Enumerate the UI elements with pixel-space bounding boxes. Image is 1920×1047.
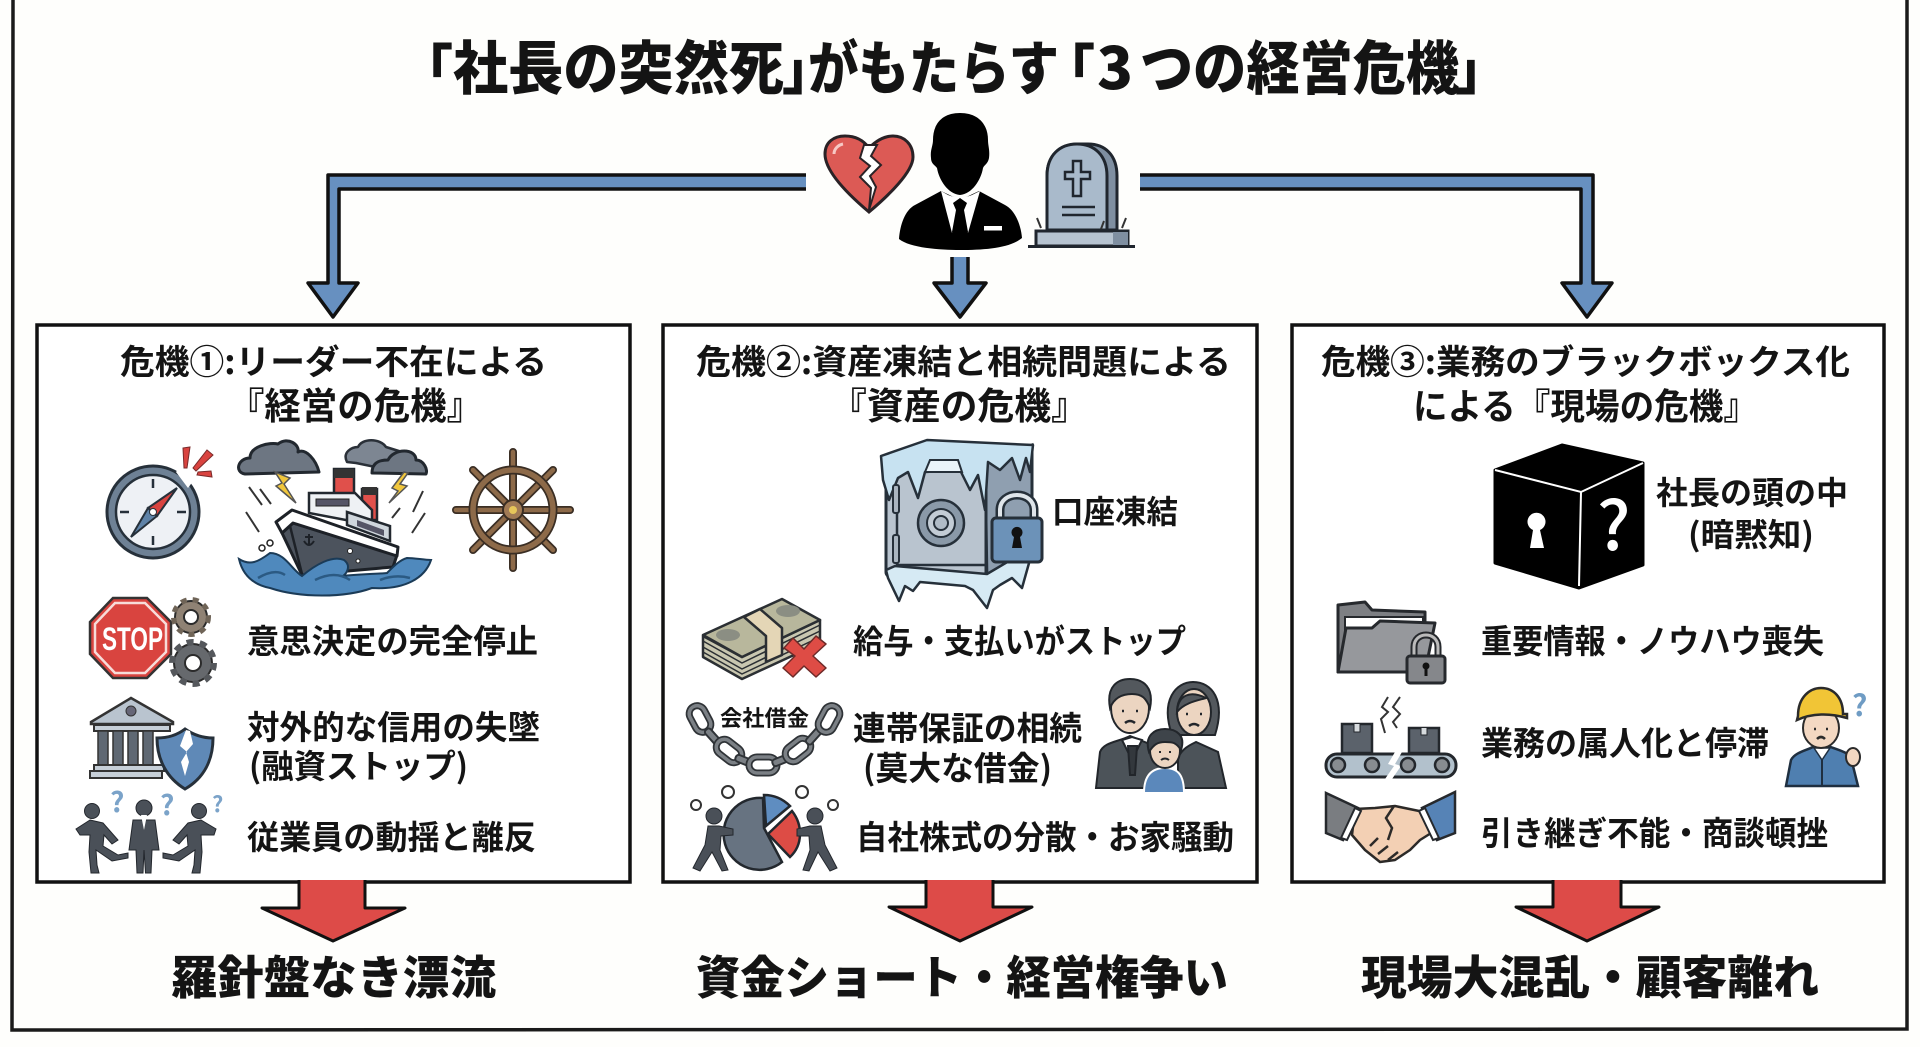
icon: chain with company debt: 会社借金 (720, 701, 809, 733)
arrow: red result 2 (889, 880, 1032, 941)
text: decision stop: 意思決定の完全停止 (247, 615, 538, 663)
icon: broken conveyor (1326, 697, 1456, 779)
title: 社長の突然死 (453, 22, 784, 106)
icon: broken compass (107, 447, 213, 558)
text: joint guarantee (853, 702, 1082, 790)
text: joint guarantee: 連帯保証の相続 (853, 702, 1082, 750)
icon: employees leaving (76, 781, 223, 873)
text: credit loss: 対外的な信用の失墜 (247, 701, 540, 749)
panel 1 heading: 危機①:リーダー不在による (120, 335, 547, 384)
icon: broken heart (825, 136, 913, 212)
text: siloed work: 業務の属人化と停滞 (1481, 717, 1769, 765)
icon: cash stack with cross (703, 599, 826, 679)
icon: frozen safe (881, 440, 1042, 608)
text: joint guarantee: (莫大な借金) (863, 742, 1052, 790)
text: stock dispute: 自社株式の分散・お家騒動 (856, 811, 1234, 859)
icon: grieving family (1096, 679, 1226, 793)
text: account freeze: 口座凍結 (1052, 487, 1178, 533)
arrow: centre connector (934, 257, 986, 317)
panel 2 heading (696, 335, 1231, 430)
icon: chain with company debt (686, 701, 843, 773)
panel 3 heading: による『現場の危機』 (1413, 378, 1758, 430)
text: credit loss: (融資ストップ) (249, 740, 468, 788)
text: know-how loss: 重要情報・ノウハウ喪失 (1481, 615, 1824, 663)
text: credit loss (247, 701, 540, 788)
icon: bank and cracked shield (90, 698, 213, 789)
icon: employees leaving: ? (212, 787, 223, 819)
arrow: red result 1 (262, 880, 405, 941)
title: 」 (782, 26, 836, 105)
title: 3 (1097, 22, 1133, 106)
text: tacit knowledge: 社長の頭の中 (1656, 468, 1848, 514)
text: handover failure: 引き継ぎ不能・商談頓挫 (1481, 807, 1828, 855)
title (399, 22, 1509, 106)
icon: locked folder (1338, 602, 1445, 683)
panel: crisis 1 management (37, 325, 630, 882)
icon: president silhouette (899, 113, 1022, 250)
result text 3: 現場大混乱・顧客離れ (1361, 942, 1819, 1008)
central icons: president death (825, 113, 1135, 250)
result text 2: 資金ショート・経営権争い (696, 942, 1228, 1008)
text: tacit knowledge: (暗黙知) (1688, 510, 1814, 556)
title: 「 (399, 26, 453, 105)
title: がもたらす (808, 22, 1059, 106)
icon: black box: ? (1597, 471, 1630, 570)
icon: confused worker (1786, 681, 1867, 786)
title: つの経営危機 (1140, 22, 1459, 106)
arrow: red result 3 (1516, 880, 1659, 941)
icon: employees leaving: ? (160, 784, 174, 824)
icon: employees leaving: ? (110, 781, 124, 821)
icon: handshake (1326, 792, 1455, 862)
panel 2 heading: 危機②:資産凍結と相続問題による (696, 335, 1231, 384)
icon: confused worker: ? (1852, 681, 1867, 725)
title: 「 (1041, 26, 1095, 105)
title: 」 (1455, 26, 1509, 105)
icon: black box (1495, 445, 1643, 588)
arrow: right connector (1140, 175, 1612, 317)
panel 3 heading: 危機③:業務のブラックボックス化 (1321, 335, 1850, 384)
icon: ship in storm (239, 440, 431, 596)
arrow: left connector (308, 175, 806, 317)
panel: crisis 3 field (1292, 325, 1884, 882)
icon: stop sign and gears (90, 598, 214, 684)
icon: ship wheel (456, 452, 570, 568)
result text 1: 羅針盤なき漂流 (171, 942, 496, 1008)
icon: stop sign and gears: STOP (102, 621, 163, 657)
panel 1 heading (120, 335, 547, 430)
panel 2 heading: 『資産の危機』 (830, 376, 1088, 430)
icon: pie chart fight (691, 786, 838, 871)
text: salary stop: 給与・支払いがストップ (853, 615, 1186, 663)
panel 1 heading: 『経営の危機』 (228, 376, 483, 430)
panel: crisis 2 assets (663, 325, 1257, 882)
panel 3 heading (1321, 335, 1850, 430)
text: employees: 従業員の動揺と離反 (247, 811, 536, 859)
text: tacit knowledge (1656, 468, 1848, 556)
icon: gravestone (1028, 144, 1135, 246)
